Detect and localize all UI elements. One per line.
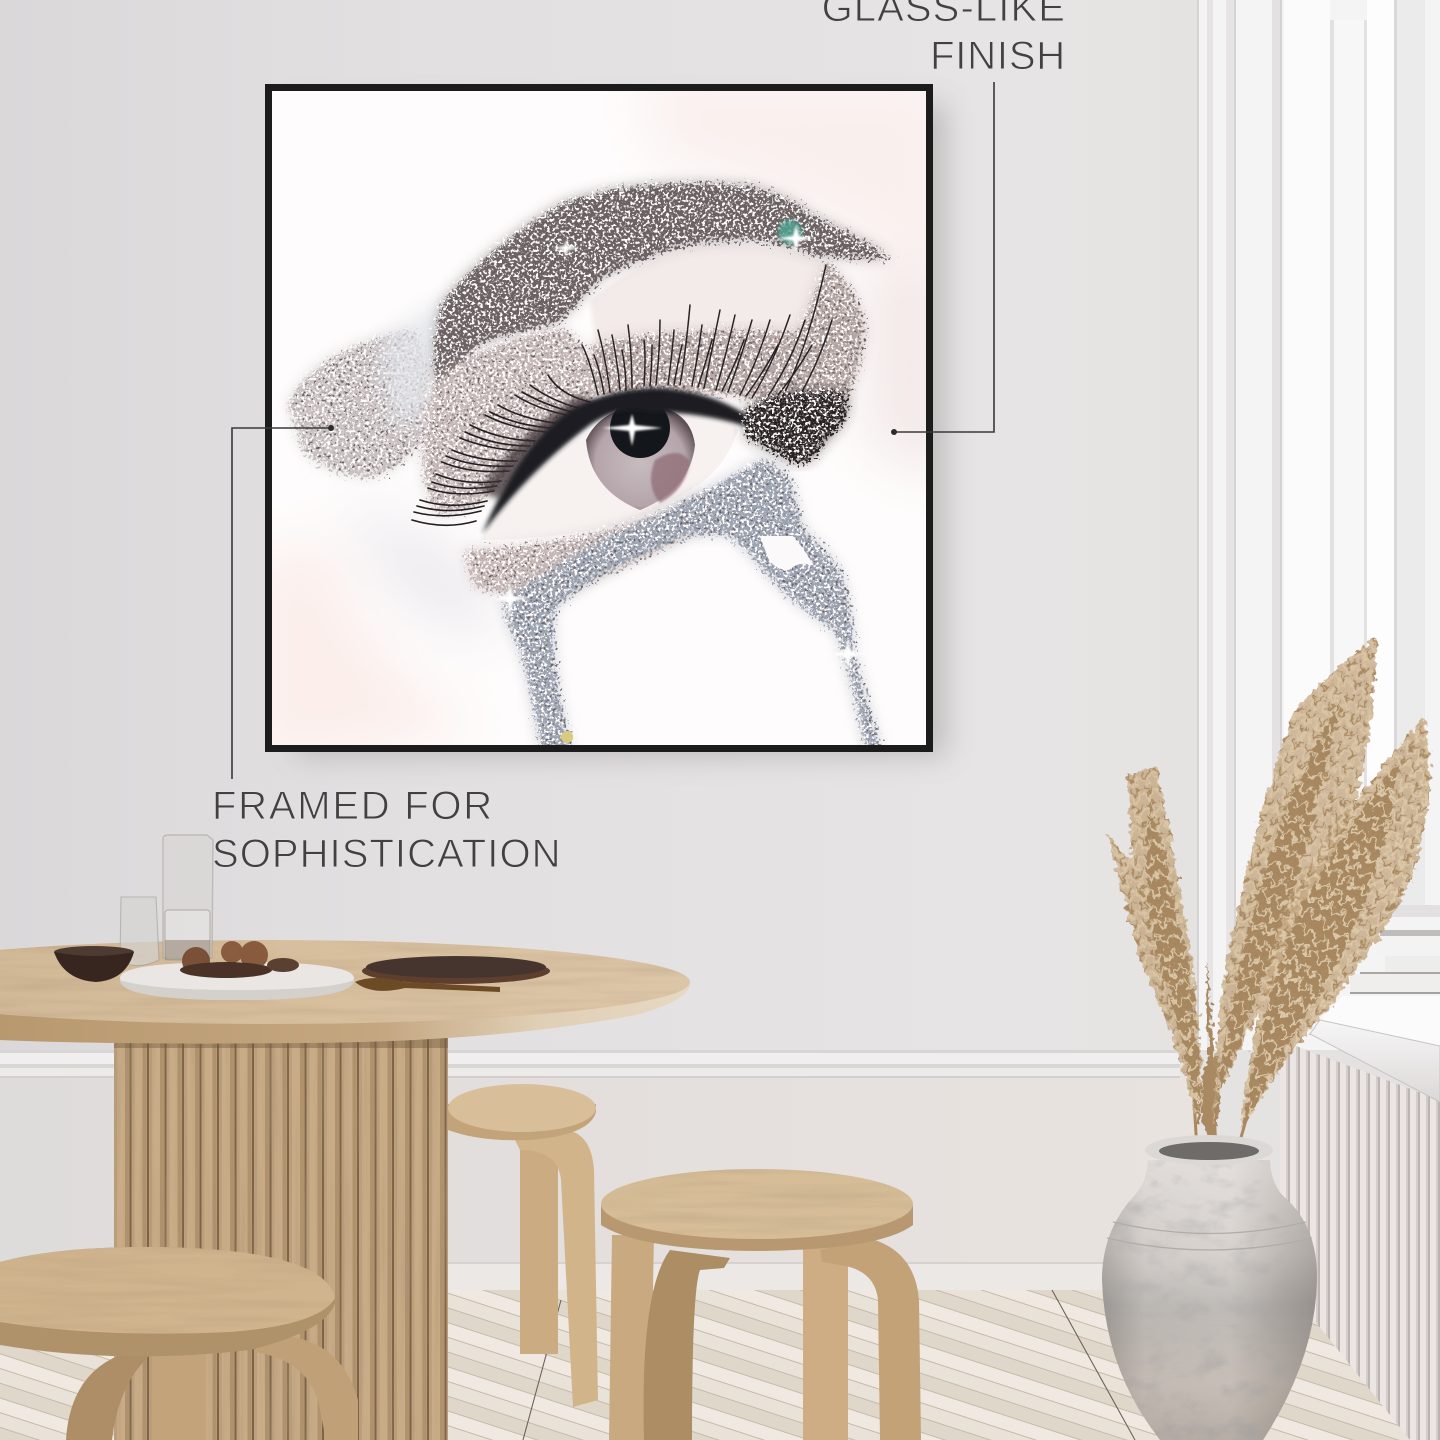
window sill <box>1320 996 1440 1046</box>
lash base smudge <box>480 395 600 500</box>
plume left <box>1106 766 1201 1125</box>
floor <box>0 1290 1410 1440</box>
star sparkles <box>490 225 866 670</box>
round table top <box>0 940 690 1044</box>
glitter left blob <box>288 330 425 476</box>
callout text: FRAMED FOR <box>212 784 494 828</box>
eyelid skin <box>590 243 830 373</box>
pupil <box>610 406 670 458</box>
glass jar <box>163 835 213 960</box>
sill edge <box>1310 1020 1440 1102</box>
iris brown patch <box>651 453 690 503</box>
left lashes <box>412 375 590 525</box>
pale blue dust <box>380 300 450 420</box>
upper lid dark band <box>482 388 760 534</box>
callout: framed for sophistication <box>212 425 562 876</box>
vase rim <box>1145 1135 1273 1165</box>
ceramic vase <box>1102 1135 1317 1440</box>
dark outer lash mass <box>745 390 846 462</box>
marble plate with nuts <box>120 941 354 1000</box>
blush haze <box>272 91 926 745</box>
dark bowl <box>54 946 134 982</box>
glitter lash zone left <box>423 328 600 513</box>
pink lower lid glitter <box>464 492 700 596</box>
blue glitter tears <box>503 460 880 750</box>
framed artwork <box>265 84 933 752</box>
drinking glass <box>120 897 159 966</box>
framed artwork shadow <box>296 104 946 756</box>
right stool <box>601 1169 921 1440</box>
spoon <box>355 978 500 992</box>
art content clipped to canvas <box>272 91 926 745</box>
black frame <box>265 84 933 752</box>
callout: framed for sophistication: SOPHISTICATION <box>212 832 562 876</box>
eye white <box>480 403 738 540</box>
art canvas <box>272 91 926 745</box>
gold fleck <box>561 731 573 743</box>
callout: glass-like finish: FINISH <box>930 34 1066 78</box>
wooden plate <box>362 956 550 984</box>
radiator <box>1280 1040 1440 1440</box>
stems <box>1194 1100 1246 1155</box>
iris <box>586 405 695 510</box>
table pedestal <box>114 1030 448 1440</box>
wainscot moulding and lower wall <box>0 1050 1200 1290</box>
pampas grass <box>1106 636 1430 1155</box>
upper lashes <box>582 265 832 414</box>
plume small <box>1201 960 1221 1135</box>
plume right <box>1240 716 1430 1130</box>
glitter brow <box>434 183 890 390</box>
callout: glass-like finish <box>822 0 1066 435</box>
glitter right of lid <box>760 262 864 458</box>
plume middle <box>1213 636 1377 1127</box>
left stool <box>0 1247 358 1440</box>
teal sparkle <box>778 220 802 244</box>
back stool <box>448 1084 598 1407</box>
window and white trim <box>1197 0 1440 1050</box>
chain gap in tear <box>760 536 814 570</box>
books on window sill <box>1350 930 1440 994</box>
glitter upper lid band <box>590 330 815 405</box>
vase rings <box>1107 1222 1312 1250</box>
